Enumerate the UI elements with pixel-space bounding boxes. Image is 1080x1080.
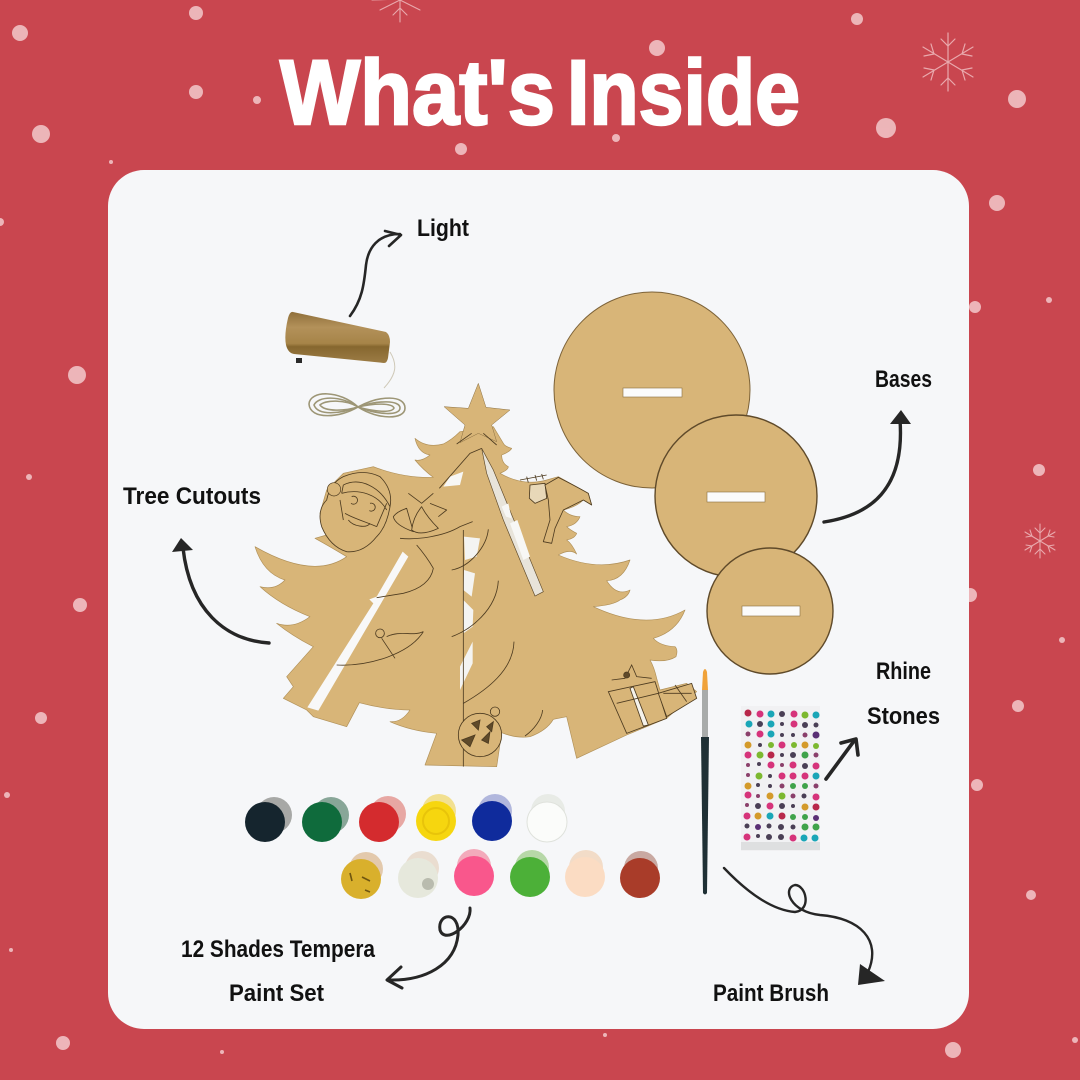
arrow: bases	[824, 410, 911, 522]
label: 12 Shades Tempera Paint Set: 12 Shades Tempera	[181, 936, 376, 963]
paint pot: brown	[620, 851, 660, 898]
paint pot: peach	[565, 850, 605, 897]
label: Tree Cutouts: Tree Cutouts	[123, 483, 261, 510]
bells	[393, 493, 447, 533]
panel: contents card	[108, 170, 969, 1029]
arrow: tree cutouts	[172, 538, 269, 643]
label: Bases: Bases	[875, 366, 932, 393]
title: Inside	[567, 42, 800, 144]
tree silhouette	[255, 427, 697, 767]
icon: snowflake right	[923, 33, 973, 91]
arrow: light	[350, 231, 401, 316]
arrow: rhine stones	[826, 739, 858, 779]
tree cutouts	[255, 383, 697, 767]
label: 12 Shades Tempera Paint Set: Paint Set	[229, 980, 324, 1007]
label: Light: Light	[417, 215, 469, 242]
Santa	[320, 472, 391, 552]
paint brush	[701, 669, 709, 894]
paint pot: blue	[472, 794, 512, 841]
base: medium circle	[655, 415, 817, 577]
paint pot: red	[359, 796, 406, 842]
title: What's	[280, 42, 555, 144]
base: small circle	[707, 548, 833, 674]
rhinestones sheet	[741, 706, 820, 851]
light: cork battery	[285, 312, 395, 388]
star	[444, 383, 510, 443]
paint pot: glitter white	[398, 851, 439, 898]
centre slot	[460, 537, 480, 690]
paint pot: gold	[341, 852, 383, 899]
ornament	[458, 707, 502, 757]
arrow: paint set	[387, 908, 470, 988]
icon: snowflake small right	[1025, 524, 1055, 558]
light: wire bundle	[309, 394, 405, 417]
paint pot: pink	[454, 849, 494, 896]
label: Paint Brush: Paint Brush	[713, 980, 829, 1007]
arrow: paint brush	[724, 868, 885, 985]
cone hat	[376, 629, 423, 658]
top slot	[482, 448, 543, 596]
label: Rhine Stones	[867, 658, 940, 730]
label: Rhine Stones: Rhine	[876, 658, 931, 685]
left tree slot	[307, 552, 408, 711]
base: large circle	[554, 292, 750, 488]
gift boxes	[608, 665, 697, 733]
paint pot: dark green	[302, 797, 349, 842]
paint pot: white	[527, 794, 567, 842]
label: 12 Shades Tempera Paint Set	[181, 936, 376, 1007]
icon: snowflake top	[372, 0, 428, 22]
paint pot: yellow	[416, 794, 456, 841]
reindeer	[520, 474, 592, 543]
paint pot: black	[245, 797, 292, 842]
paint pot: light green	[510, 850, 550, 897]
title	[280, 42, 800, 144]
label: Rhine Stones: Stones	[867, 703, 940, 730]
cut lines	[337, 433, 543, 767]
